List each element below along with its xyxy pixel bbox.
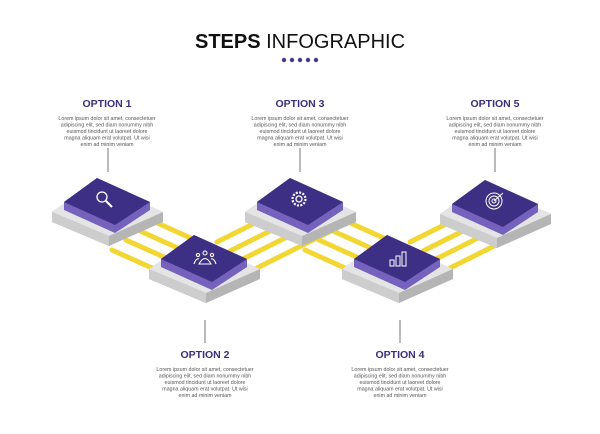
option 3 text: OPTION 3: [275, 98, 325, 110]
option 3 text: [251, 98, 349, 148]
option 5 text: euismod tincidunt ut laoreet dolore: [455, 129, 536, 135]
icon: bar chart: [390, 252, 406, 266]
option 3 text: enim ad minim veniam: [274, 142, 327, 148]
option 2 text: enim ad minim veniam: [178, 393, 232, 399]
icon: target: [486, 193, 503, 209]
option 4 text: magna aliquam erat volutpat. Ut wisi: [357, 386, 443, 392]
option 2 text: OPTION 2: [180, 349, 230, 361]
icon: magnifier: [97, 192, 112, 207]
block 3: [245, 178, 356, 246]
option 4 text: [351, 349, 449, 399]
option 3 text: magna aliquam erat volutpat. Ut wisi: [257, 136, 343, 142]
option 1 text: adipiscing elit, sed diam nonummy nibh: [61, 122, 153, 128]
option 3 text: adipiscing elit, sed diam nonummy nibh: [254, 122, 346, 128]
block 5: [440, 180, 551, 248]
block 1: [52, 178, 163, 246]
option 5 text: [446, 98, 544, 148]
option 1 text: enim ad minim veniam: [80, 142, 134, 148]
option 5 text: magna aliquam erat volutpat. Ut wisi: [452, 136, 538, 142]
leader lines: [108, 148, 495, 343]
option 1 text: [58, 98, 156, 148]
icon: team: [194, 251, 216, 264]
yellow connectors: [112, 202, 530, 286]
title: STEPS INFOGRAPHIC: [195, 31, 405, 53]
option 5 text: OPTION 5: [470, 98, 520, 110]
option 4 text: OPTION 4: [375, 349, 425, 361]
option 4 text: adipiscing elit, sed diam nonummy nibh: [354, 374, 446, 380]
option 4 text: euismod tincidunt ut laoreet dolore: [360, 380, 441, 386]
option 1 text: OPTION 1: [82, 98, 132, 110]
option 5 text: Lorem ipsum dolor sit amet, consectetuer: [446, 116, 544, 122]
option 2 text: adipiscing elit, sed diam nonummy nibh: [159, 374, 251, 380]
option 4 text: Lorem ipsum dolor sit amet, consectetuer: [351, 367, 449, 373]
option 3 text: euismod tincidunt ut laoreet dolore: [260, 129, 341, 135]
icon: gear: [292, 192, 306, 206]
option 1 text: euismod tincidunt ut laoreet dolore: [67, 129, 148, 135]
option 4 text: enim ad minim veniam: [374, 393, 427, 399]
option 2 text: Lorem ipsum dolor sit amet, consectetuer: [156, 367, 254, 373]
option 1 text: Lorem ipsum dolor sit amet, consectetuer: [58, 116, 156, 122]
option 2 text: magna aliquam erat volutpat. Ut wisi: [162, 386, 248, 392]
option 5 text: adipiscing elit, sed diam nonummy nibh: [449, 122, 541, 128]
option 1 text: magna aliquam erat volutpat. Ut wisi: [64, 136, 150, 142]
option 5 text: enim ad minim veniam: [468, 142, 522, 148]
title dots: [282, 58, 318, 62]
option 2 text: euismod tincidunt ut laoreet dolore: [165, 380, 246, 386]
block 4: [342, 235, 453, 303]
block 2: [149, 235, 260, 303]
option 2 text: [156, 349, 254, 399]
option 3 text: Lorem ipsum dolor sit amet, consectetuer: [251, 116, 349, 122]
